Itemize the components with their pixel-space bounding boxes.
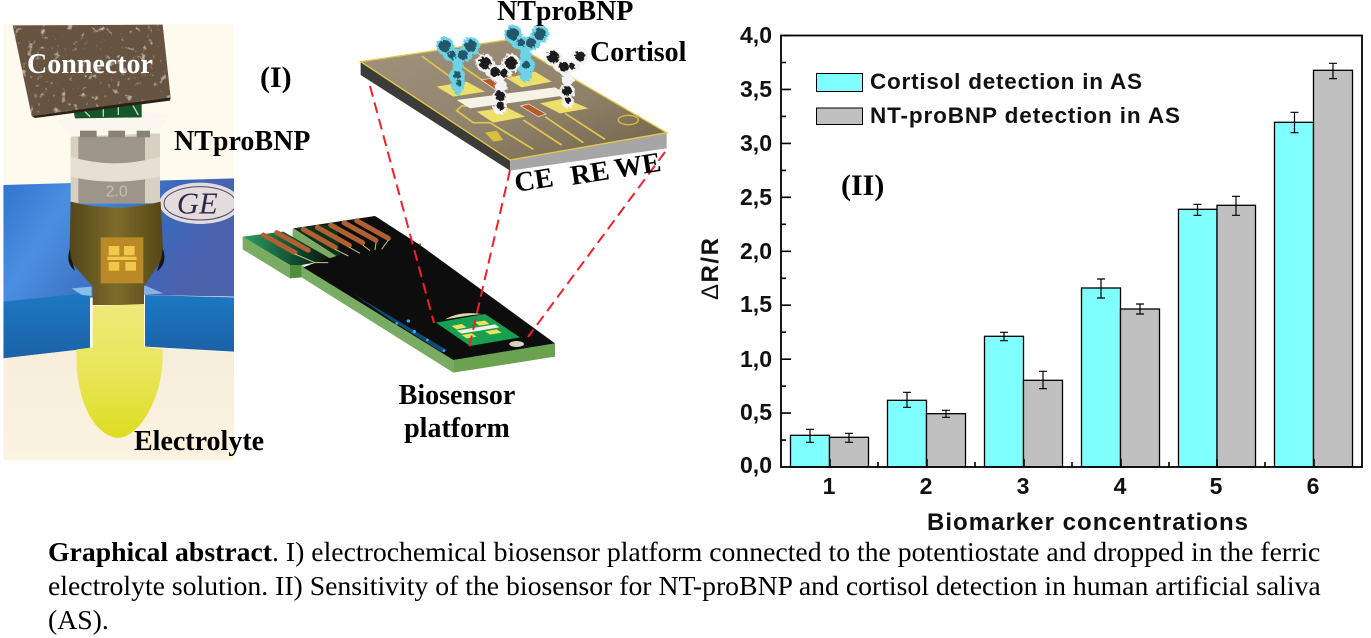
x axis labels: 4	[1114, 473, 1127, 499]
label: Connector: Connector	[27, 49, 153, 80]
x axis labels: 2	[920, 473, 932, 499]
antibody: Cortisol 2	[544, 47, 589, 108]
legend	[816, 69, 1180, 128]
antibody: Cortisol 1	[476, 54, 520, 115]
label: Biosensor platform: platform	[404, 413, 510, 444]
x axis labels: 5	[1210, 473, 1223, 499]
label: Biosensor platform	[399, 380, 515, 444]
label: Biosensor platform: Biosensor	[399, 380, 515, 411]
bar chart	[697, 22, 1362, 536]
label: NTproBNP left: NTproBNP	[174, 126, 310, 157]
photo: sensor dipped in electrolyte: GE	[177, 186, 218, 220]
y axis labels: 1,0	[740, 346, 772, 372]
legend: NT-proBNP detection in AS	[870, 103, 1180, 128]
photo: sensor dipped in electrolyte	[3, 24, 241, 460]
photo: sensor dipped in electrolyte: 2.0	[106, 184, 128, 201]
caption: Graphical abstract. I) electrochemical biosensor platform connected to the potentiostate and dropped in the ferric	[48, 536, 1320, 567]
biosensor platform device	[243, 216, 555, 373]
y axis labels: 3,5	[740, 76, 772, 102]
y axis labels: 3,0	[740, 130, 772, 156]
label: Electrolyte: Electrolyte	[134, 426, 264, 457]
caption: electrolyte solution. II) Sensitivity of the biosensor for NT-proBNP and cortisol detection in human artificial saliva	[48, 570, 1321, 601]
electrode labels	[512, 147, 663, 199]
y axis labels: 2,0	[740, 238, 772, 264]
x axis title: Biomarker concentrations	[927, 509, 1248, 536]
y axis labels: 1,5	[740, 291, 772, 317]
panel label II: (II)	[841, 169, 884, 202]
y axis labels	[740, 22, 772, 478]
y axis labels: 0,5	[740, 399, 772, 425]
red dashed projection lines	[370, 86, 665, 352]
x axis labels: 6	[1307, 473, 1319, 499]
x axis labels	[823, 473, 1319, 499]
chip close-up	[361, 40, 667, 171]
caption: (AS).	[48, 604, 109, 635]
y axis labels: 2,5	[740, 184, 772, 210]
y axis labels: 0,0	[740, 452, 772, 478]
legend: Cortisol detection in AS	[870, 69, 1142, 94]
y axis title: ΔR/R	[697, 238, 724, 300]
antibody: NTproBNP 2	[504, 25, 549, 82]
electrode labels: RE	[568, 155, 612, 192]
caption	[48, 536, 1321, 635]
label: Cortisol: Cortisol	[590, 37, 687, 68]
antibody: NTproBNP 1	[436, 37, 480, 95]
electrode labels: CE	[512, 162, 556, 199]
x axis labels: 3	[1017, 473, 1029, 499]
electrode labels: WE	[612, 147, 663, 185]
panel label I: (I)	[260, 61, 292, 94]
x axis labels: 1	[823, 473, 836, 499]
y axis labels: 4,0	[740, 22, 772, 48]
